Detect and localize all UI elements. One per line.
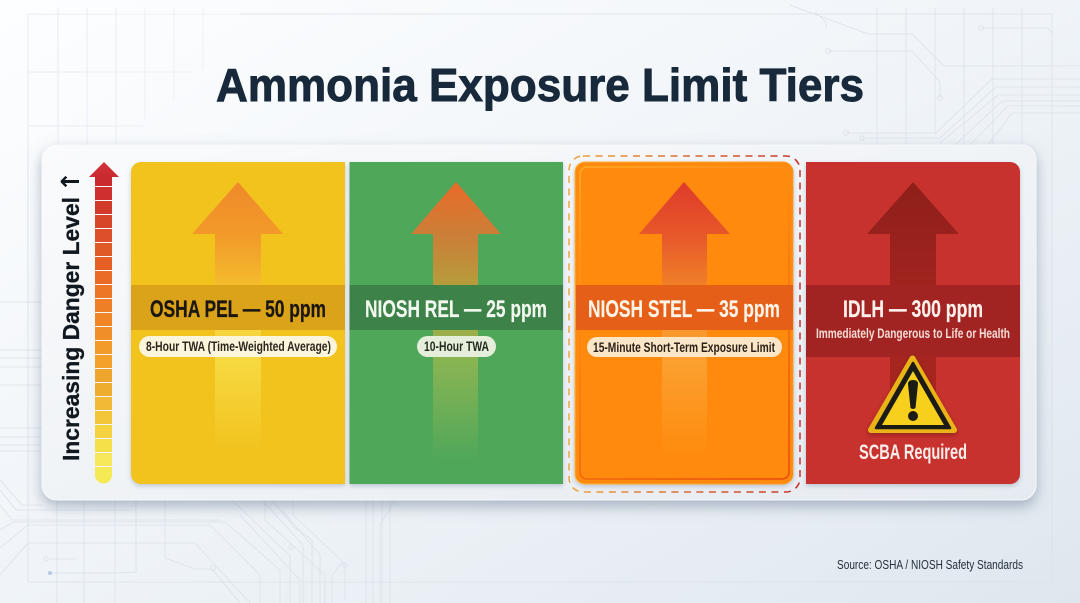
pill: 15-Minute STEL bbox=[587, 337, 782, 357]
label: NIOSH REL value: NIOSH REL — 25 ppm bbox=[365, 296, 547, 323]
source note: Source: OSHA / NIOSH Safety Standards bbox=[837, 558, 1023, 572]
dashed highlight outline bbox=[569, 156, 800, 492]
arrow: red card bbox=[867, 182, 959, 400]
card: OSHA PEL bbox=[131, 162, 345, 484]
pill: 10-Hour TWA bbox=[417, 336, 496, 357]
pill: 10-Hour TWA: 10-Hour TWA bbox=[424, 339, 489, 354]
pill: 8-Hour TWA bbox=[139, 336, 337, 357]
arrow: yellow card bbox=[192, 182, 283, 450]
label: SCBA required: SCBA Required bbox=[859, 441, 967, 464]
inner border bbox=[580, 167, 789, 479]
label: OSHA PEL value: OSHA PEL — 50 ppm bbox=[150, 296, 326, 323]
label: NIOSH STEL value: NIOSH STEL — 35 ppm bbox=[588, 296, 780, 323]
label: IDLH description: Immediately Dangerous to Life or Health bbox=[816, 326, 1010, 341]
card: NIOSH REL bbox=[350, 162, 563, 484]
title: Ammonia Exposure Limit Tiers bbox=[216, 59, 864, 111]
card: IDLH bbox=[806, 162, 1020, 484]
band: OSHA PEL bbox=[131, 285, 345, 330]
pill: 15-Minute STEL: 15-Minute Short-Term Exposure Limit bbox=[593, 340, 775, 355]
icon: warning triangle bbox=[871, 358, 954, 430]
band: NIOSH REL bbox=[350, 285, 563, 330]
band: NIOSH STEL bbox=[576, 285, 793, 330]
card: NIOSH STEL highlighted bbox=[569, 156, 800, 492]
pill: 8-Hour TWA: 8-Hour TWA (Time-Weighted Average) bbox=[146, 339, 331, 354]
arrow: green card bbox=[411, 182, 501, 460]
band: IDLH bbox=[806, 285, 1020, 357]
arrow: orange card bbox=[639, 182, 730, 460]
danger level label: Increasing Danger Level bbox=[58, 197, 84, 461]
label: IDLH value: IDLH — 300 ppm bbox=[843, 296, 983, 323]
danger scale bar bbox=[89, 162, 119, 484]
danger level label: ↑ bbox=[56, 171, 85, 192]
panel: exposure tiers bbox=[42, 145, 1036, 500]
